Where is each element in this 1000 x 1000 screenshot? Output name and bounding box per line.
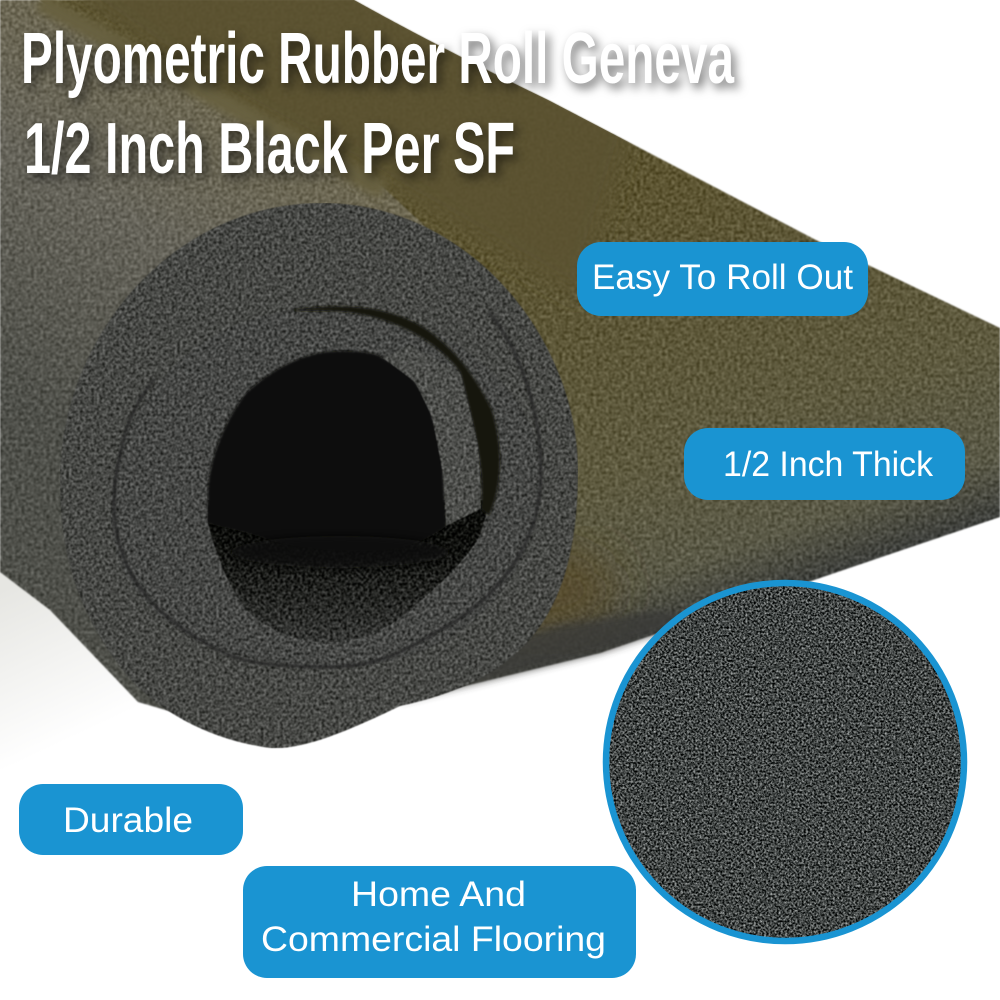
title: [21, 19, 735, 189]
soft cylinder highlight edge: [40, 2, 383, 190]
callout: thickness: 1/2 Inch Thick: [723, 445, 933, 484]
callout: easy to roll out: Easy To Roll Out: [592, 258, 853, 297]
crescent gap: [290, 306, 500, 516]
callout: thickness: [684, 428, 965, 500]
product photo: rubber roll: [0, 0, 1000, 748]
callout: easy to roll out: [577, 242, 868, 316]
callout: durable: [19, 784, 243, 855]
rubber texture: [600, 580, 970, 950]
callout: home and commercial flooring: Home And: [351, 875, 526, 914]
inner floor of the roll: [208, 500, 490, 642]
rolled out sheet: [38, 0, 1000, 702]
callout: home and commercial flooring: Commercial Flooring: [261, 920, 606, 959]
detail circle: [600, 580, 970, 950]
roll cylinder body: [0, 0, 440, 720]
circle border: [606, 583, 964, 941]
warm patch of sheet near roll: [475, 550, 615, 630]
title: 1/2 Inch Black Per SF: [24, 109, 515, 189]
bottom dark lip of sheet: [400, 610, 700, 702]
outer groove: [114, 312, 541, 667]
flap end: [383, 345, 481, 526]
hole: [208, 351, 446, 551]
outer layer face: [60, 203, 578, 748]
inner layer face: [111, 307, 541, 667]
floor shadow area: [0, 560, 240, 830]
callout: durable: Durable: [63, 801, 193, 840]
soft shadow below the hole: [230, 536, 450, 568]
olive band behind the roll: [20, 0, 640, 300]
roll end face: [60, 203, 578, 748]
callout: home and commercial flooring: [243, 866, 636, 978]
